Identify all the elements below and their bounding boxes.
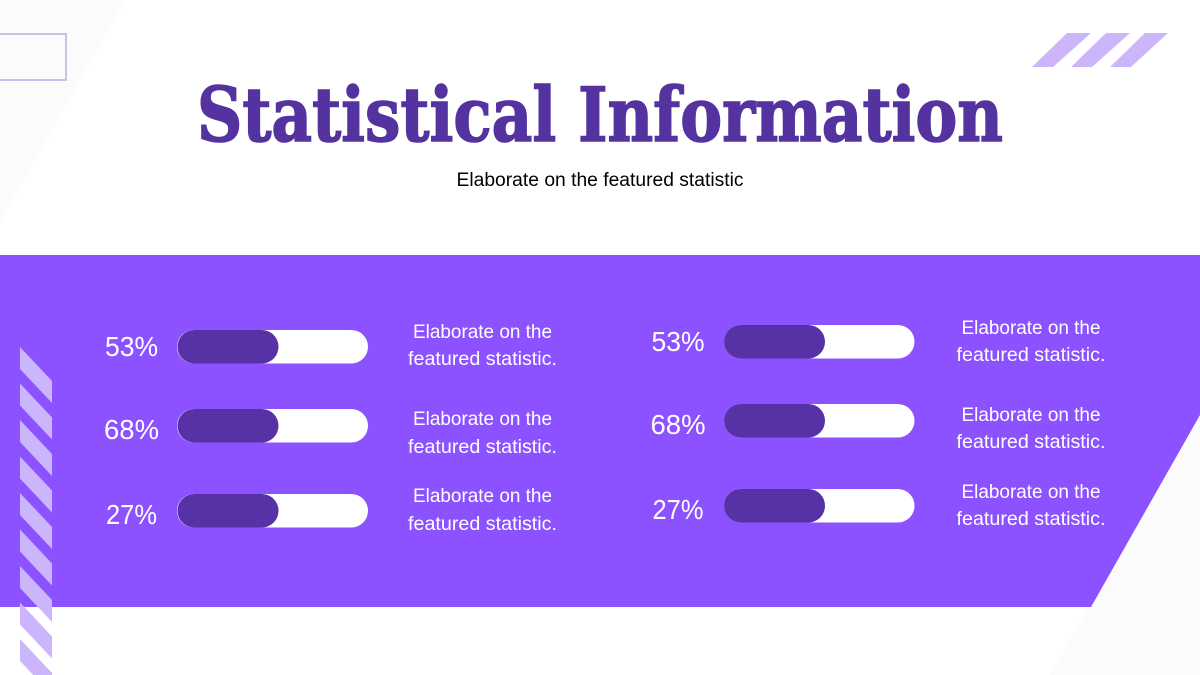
- background shape: bottom-right pale triangle: [1050, 415, 1200, 675]
- outlined rectangle decoration: [0, 34, 66, 80]
- stat row: 68% right: featured statistic.: [956, 431, 1106, 453]
- stat row: 27% left: featured statistic.: [408, 513, 557, 535]
- stat row: 27% left: 27%: [106, 499, 157, 530]
- stat row: 53% right: Elaborate on the: [962, 317, 1100, 339]
- stat row: 68% right: [650, 404, 1106, 453]
- background shape: top-left pale triangle: [0, 0, 125, 222]
- left vertical diagonal stripes: [20, 347, 52, 675]
- stat row: 27% right: Elaborate on the: [962, 481, 1100, 503]
- stat row: 68% left: 68%: [104, 414, 159, 445]
- right column statistics: [650, 317, 1106, 530]
- title: Statistical Information: [197, 71, 1003, 159]
- stat row: 53% left: [105, 321, 557, 370]
- top-right diagonal stripes: [1032, 33, 1168, 67]
- stat row: 27% right: 27%: [652, 494, 704, 525]
- left column statistics: [104, 321, 557, 535]
- stat row: 53% right: [652, 317, 1106, 366]
- stat row: 68% left: [104, 408, 557, 458]
- stat row: 68% left: featured statistic.: [408, 436, 557, 458]
- stat row: 53% left: 53%: [105, 331, 158, 362]
- stat row: 27% left: Elaborate on the: [413, 485, 552, 507]
- subtitle: Elaborate on the featured statistic: [456, 170, 744, 191]
- stat row: 27% right: [652, 481, 1106, 530]
- stat row: 27% right: featured statistic.: [956, 508, 1106, 530]
- stat row: 53% right: 53%: [652, 326, 704, 357]
- stat row: 53% left: featured statistic.: [408, 348, 557, 370]
- stat row: 68% right: Elaborate on the: [962, 404, 1100, 426]
- stat row: 68% left: Elaborate on the: [413, 408, 552, 430]
- stat row: 27% left: [106, 485, 557, 535]
- stat row: 68% right: 68%: [650, 409, 706, 440]
- stat row: 53% left: Elaborate on the: [413, 321, 552, 343]
- panel: purple statistics band: [0, 255, 1200, 607]
- stat row: 53% right: featured statistic.: [956, 344, 1106, 366]
